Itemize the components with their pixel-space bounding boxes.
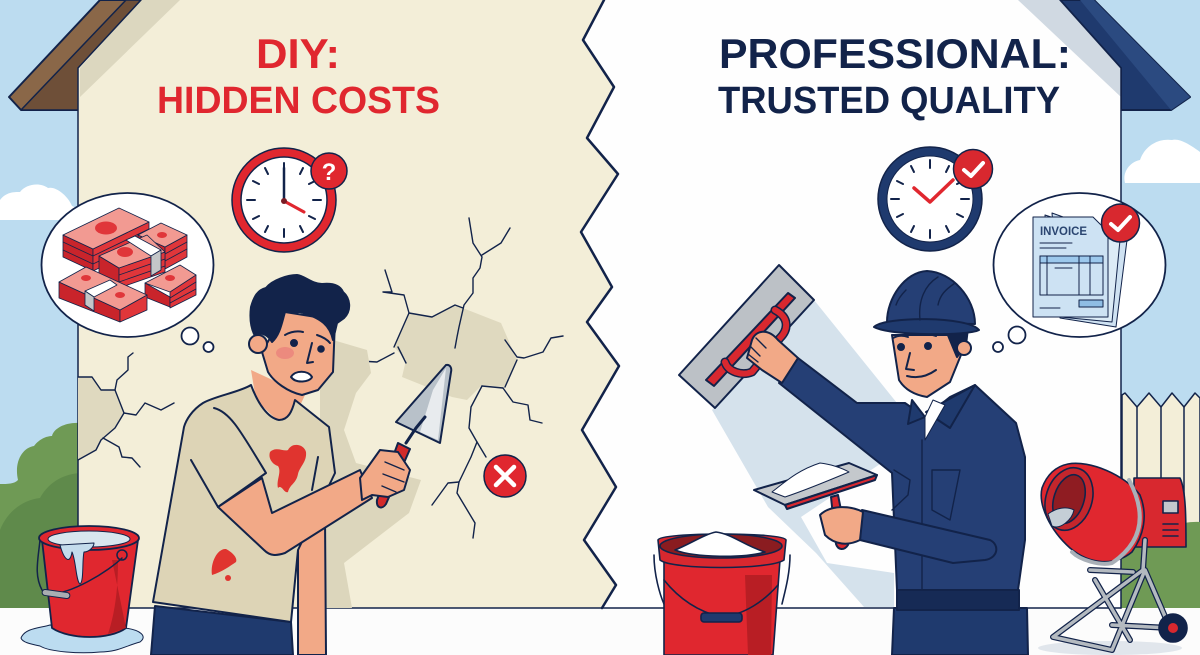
worker hair: [945, 328, 968, 357]
belt: [897, 590, 1019, 610]
eyes and brows: [285, 331, 330, 363]
mixer drum: [1041, 463, 1144, 562]
invoice label: INVOICE: [1040, 224, 1087, 238]
cement mixer: [1037, 461, 1187, 655]
wall shading right: [1018, 0, 1121, 97]
forearm: [218, 470, 372, 555]
title: DIY: [157, 30, 440, 122]
money stack back right: [138, 223, 187, 269]
neck: [251, 370, 305, 422]
mouth: [291, 372, 312, 382]
worker face: [893, 334, 936, 377]
ground line: [78, 607, 1121, 609]
head: [262, 312, 335, 395]
money stack back left: [63, 208, 149, 271]
invoice papers: [1033, 213, 1127, 327]
roof left: [9, 0, 141, 110]
title: DIY: HIDDEN COSTS: [157, 80, 440, 122]
lower sleeve: [860, 510, 996, 563]
mixer stand: [1053, 540, 1170, 650]
jacket collar: [908, 385, 975, 428]
cloud left: [0, 185, 78, 220]
t-shirt: [153, 385, 335, 622]
hand: [360, 450, 410, 500]
title: Professional: PROFESSIONAL:: [719, 30, 1071, 77]
wall outline right: [1060, 0, 1121, 608]
bucket left with puddle: [21, 526, 143, 653]
stain low: [212, 549, 236, 575]
head: [892, 335, 965, 397]
bucket right with plaster: [654, 532, 790, 655]
bush right: [1121, 522, 1200, 608]
thought bubble: money: [42, 193, 214, 352]
wall: professional side: [570, 0, 1121, 608]
pants: [892, 608, 1028, 655]
pants: [151, 606, 293, 655]
ground: [0, 608, 1200, 655]
icon: DIY clock: [232, 148, 347, 252]
mixer wheel: [1159, 614, 1187, 642]
wall: DIY side: [78, 0, 619, 608]
wall shading left: [80, 0, 180, 97]
stain chest: [269, 445, 306, 492]
mixer motor: [1134, 478, 1186, 547]
money stack front middle: [99, 235, 165, 288]
mortar hawk: [754, 463, 877, 549]
badge: check: [954, 150, 992, 188]
fence right: [1122, 393, 1200, 540]
badge: check: [1102, 204, 1140, 242]
raised hand: [747, 332, 798, 383]
title: Professional: [718, 30, 1071, 122]
badge: question mark: ?: [322, 159, 336, 186]
bush left: [0, 423, 80, 609]
plaster shadow on wall: [712, 300, 897, 607]
icon: red X badge: [484, 455, 526, 497]
shadow of DIY man: [320, 340, 421, 608]
title: DIY: DIY:: [256, 30, 340, 77]
plastering float: [679, 265, 814, 408]
cheek: [276, 347, 294, 359]
hair: [250, 275, 349, 342]
jacket: [779, 358, 1025, 590]
money stack front left: [59, 267, 147, 322]
money stack lower right: [145, 265, 196, 308]
shirt folds: [191, 408, 318, 507]
clock professional: [878, 147, 992, 251]
cloud right: [1124, 140, 1200, 183]
thought bubble: invoice: [993, 193, 1166, 352]
DIY man: [151, 275, 451, 655]
lower hand: [820, 507, 863, 544]
wall cracks: [78, 218, 563, 538]
trowel: [377, 365, 451, 507]
title: Professional: TRUSTED QUALITY: [718, 80, 1060, 122]
wall outline left: [78, 0, 141, 608]
hanging arm: [298, 517, 326, 655]
hard hat: [874, 271, 979, 334]
torn zigzag divider: [581, 0, 619, 608]
professional worker: [679, 265, 1028, 655]
roof right: [1060, 0, 1190, 110]
